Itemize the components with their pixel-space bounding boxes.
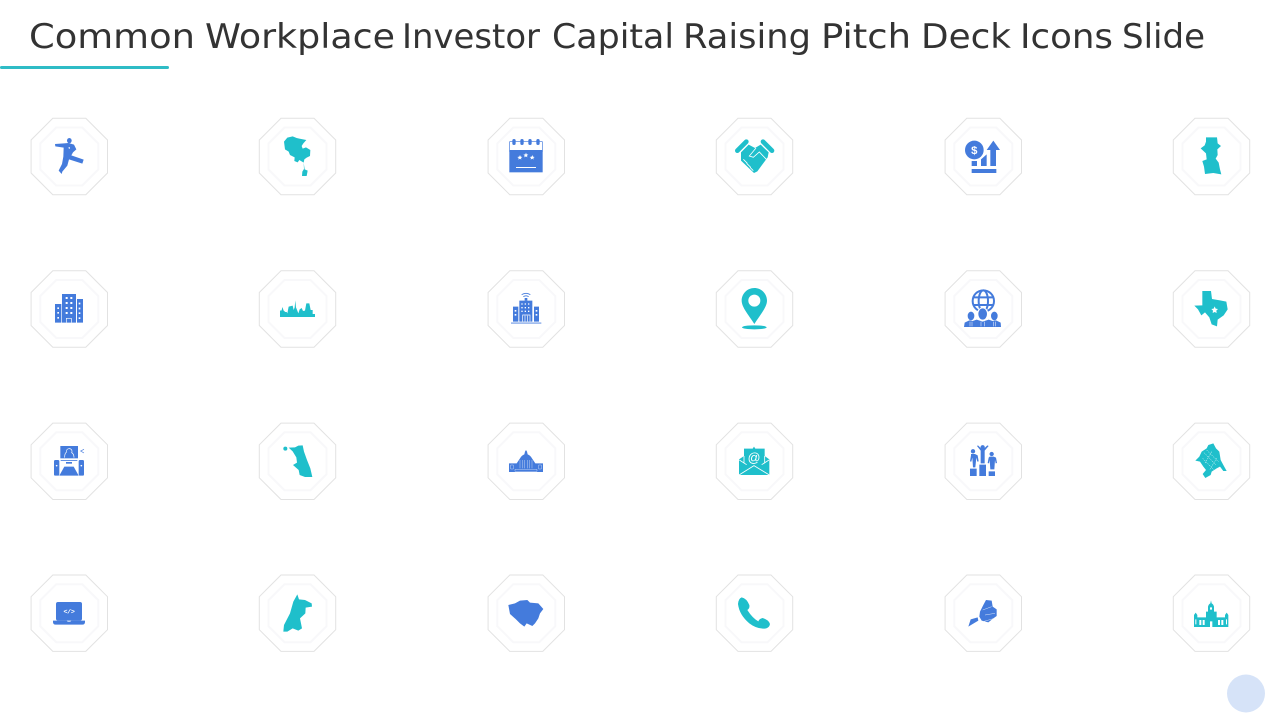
icon tile: investment growth [945,118,1022,195]
icon tile: London map [488,575,564,651]
icon: office buildings [55,294,83,323]
icon: city district map with streets [1195,443,1227,478]
title: Investor [402,17,540,57]
title: Slide [1122,17,1205,57]
icon: laptop with code: </> [64,608,75,616]
icon tile: location pin [716,271,793,347]
icon tile: Texas map [1173,271,1250,347]
icon: driver on screen with controls [54,446,84,476]
title: Common [29,17,195,57]
icon: open envelope with at sign: @ [748,451,760,465]
icon tile: global team [945,271,1022,347]
icon: building with wifi [511,293,541,323]
icon tile: laptop code [31,575,107,651]
icon: New York boroughs map [968,600,997,627]
icon tile: email [716,423,793,499]
icon: dollar coin with rising bars and arrow: $ [971,145,978,157]
icon tile: office buildings [31,271,107,347]
icon tile: wifi office building [488,271,564,347]
title: Pitch [821,17,911,57]
icon: Los Angeles map [284,136,310,176]
icon: capitol building [509,450,543,472]
icon tile: capitol building [488,423,564,499]
icon tile: city skyline [259,271,336,347]
icon tile: runner [31,118,107,195]
icon tile: winners podium [945,423,1022,499]
icon: Chicago map [283,445,312,477]
title: Deck [921,17,1011,57]
icon tile: handshake [716,118,793,195]
icon tile: Los Angeles map [259,118,336,195]
title: Icons [1020,17,1113,57]
icon tile: peninsula map [259,575,336,651]
icon tile: city district map [1173,423,1250,499]
icon tile: racing simulator [31,423,107,499]
icon: three people on podium [970,445,997,476]
icon: globe above three people [964,290,1001,327]
icon: Seattle map [1201,137,1221,174]
icon: location pin [742,288,767,329]
title: Raising [683,17,811,57]
title: Workplace [205,17,395,57]
icon tile: calendar [488,118,564,195]
icon: handshake [737,142,772,173]
icon tile: telephone [716,575,793,651]
icon tile: Seattle map [1173,118,1250,195]
icon: telephone handset [738,597,770,629]
icon: Texas map with star [1194,291,1228,326]
icon: calendar with stars [509,139,543,172]
icon tile: Chicago map [259,423,336,499]
icon: city skyline [280,300,315,317]
title: Capital [552,17,674,57]
icon: running man [55,138,84,174]
icon: government building [1194,600,1228,627]
icon: London map [508,600,543,627]
icon tile: government building [1173,575,1250,651]
page marker circle [1227,674,1265,712]
title underline accent [0,66,169,69]
icon: peninsula map [283,594,312,632]
icon tile: New York boroughs map [945,575,1022,651]
